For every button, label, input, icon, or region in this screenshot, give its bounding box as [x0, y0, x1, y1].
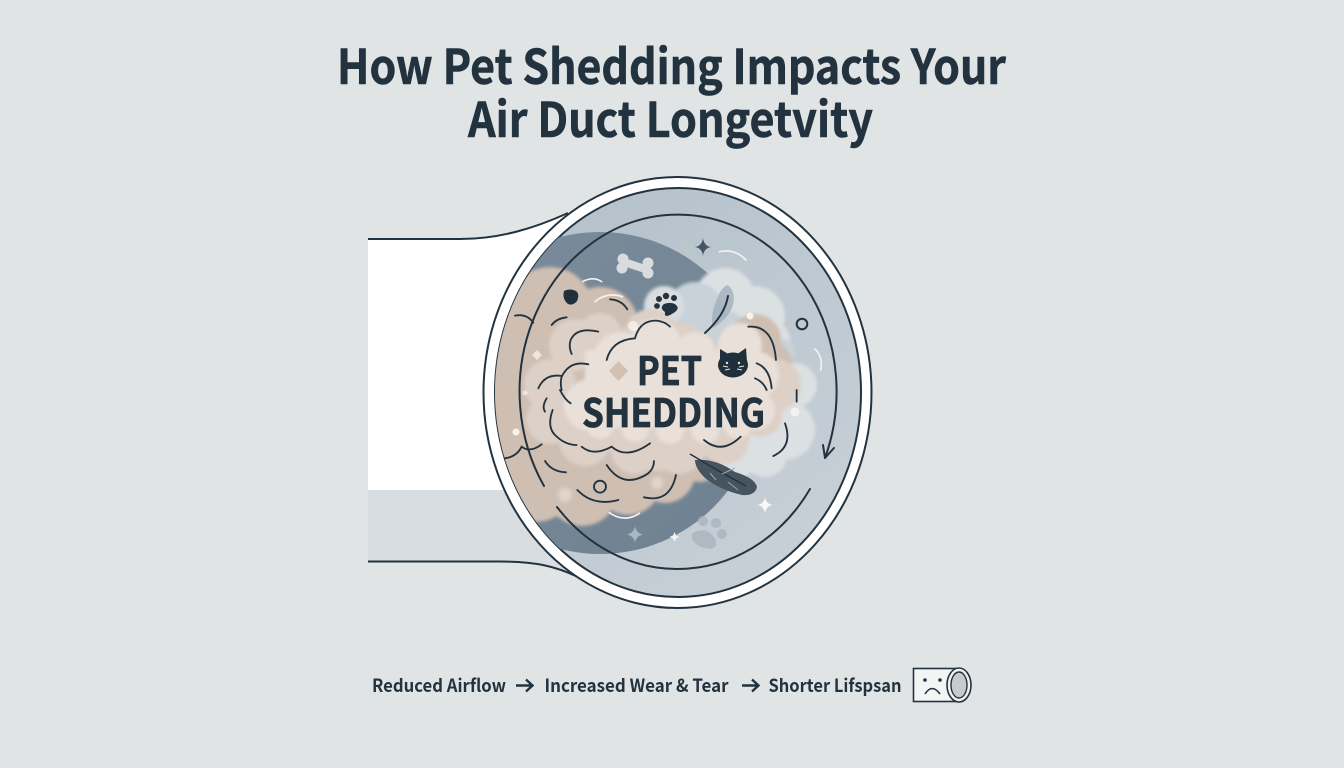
step: increased wear and tear: Increased Wear & Tear — [544, 672, 729, 698]
dark duct shadow — [495, 232, 728, 554]
arrow — [516, 680, 532, 692]
label: pet shedding: PET — [637, 341, 702, 397]
icon: sad duct — [914, 668, 971, 702]
air duct body — [368, 212, 578, 577]
icon: paw print — [654, 293, 678, 316]
title: Air Duct Longetvity — [467, 81, 873, 151]
pale dust cloud — [698, 267, 818, 478]
fur strand lines, lower — [505, 390, 797, 502]
icon: cat face — [718, 348, 748, 378]
fur strand lines, upper — [515, 299, 776, 390]
magnifier lens — [484, 177, 872, 608]
arrow — [742, 680, 758, 692]
effect chain caption — [372, 668, 971, 702]
icon: bone — [616, 254, 654, 278]
icon: dark feather — [690, 454, 757, 495]
grey-blue dust cloud — [674, 280, 792, 354]
tan fur cloud — [495, 265, 792, 528]
middle fur cloud — [524, 309, 801, 474]
clog inside the duct — [495, 232, 818, 554]
label: pet shedding — [582, 341, 765, 439]
label: pet shedding: SHEDDING — [582, 383, 765, 439]
white highlights — [583, 251, 821, 518]
light fur cloud — [564, 319, 779, 444]
circular airflow arrows — [520, 215, 837, 569]
dust specks — [512, 312, 800, 502]
paw bubble — [644, 286, 684, 326]
title — [337, 28, 1006, 151]
icon: dark fur clump — [564, 290, 578, 305]
step: reduced airflow: Reduced Airflow — [372, 672, 506, 698]
icon: faded paw print — [692, 516, 727, 549]
title: How Pet Shedding Impacts Your — [337, 28, 1006, 98]
small ring — [797, 319, 807, 329]
sparkles — [532, 238, 773, 543]
icon: grey feather — [705, 285, 734, 333]
step: shorter lifespan: Shorter Lifspsan — [768, 672, 902, 698]
